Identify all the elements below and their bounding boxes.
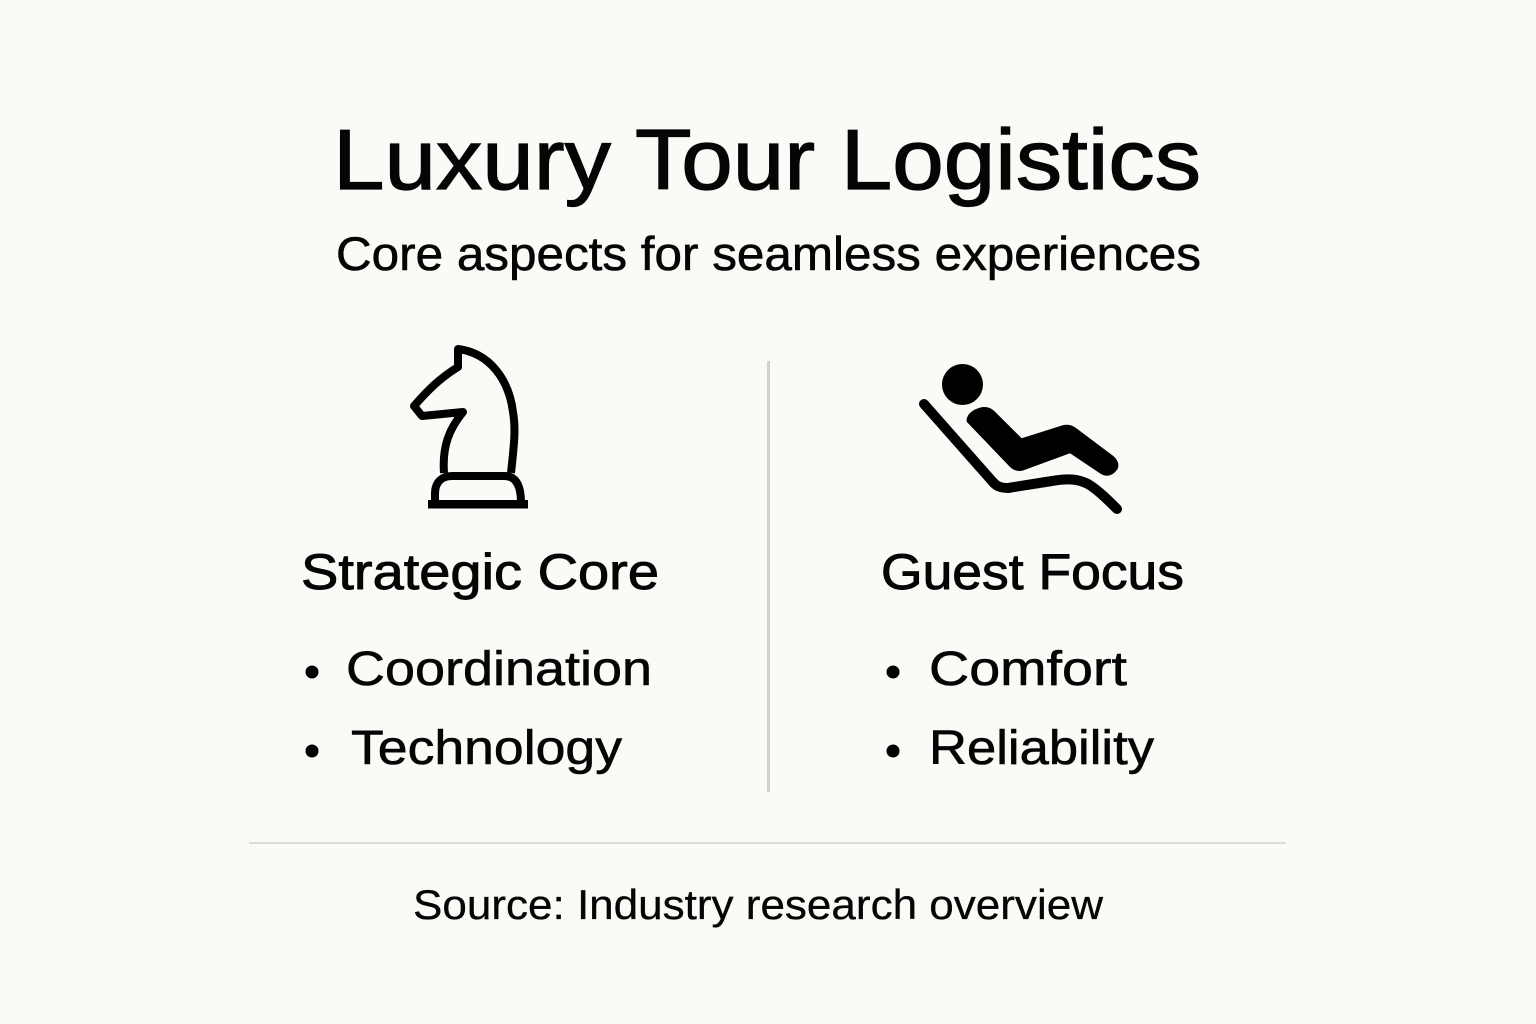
- icon: reclining person: [924, 364, 1118, 509]
- bullet list: guest focus: Reliability: [929, 722, 1154, 775]
- panel: strategic core: [301, 349, 659, 775]
- source note: Source: Industry research overview: [413, 881, 1104, 928]
- icon: chess knight: [414, 349, 528, 508]
- subtitle: Core aspects for seamless experiences: [336, 227, 1201, 280]
- horizontal divider: [249, 842, 1286, 844]
- heading: guest focus: Guest Focus: [881, 544, 1184, 600]
- vertical divider: [767, 361, 770, 792]
- heading: strategic core: Strategic Core: [301, 544, 659, 600]
- bullet list: guest focus: [886, 643, 1154, 775]
- bullet list: strategic core: Technology: [351, 722, 622, 775]
- panel: guest focus: [881, 364, 1184, 775]
- bullet list: strategic core: [306, 643, 652, 775]
- bullet list: guest focus: Comfort: [929, 643, 1127, 696]
- bullet list: strategic core: Coordination: [346, 643, 652, 696]
- title: Luxury Tour Logistics: [333, 113, 1201, 208]
